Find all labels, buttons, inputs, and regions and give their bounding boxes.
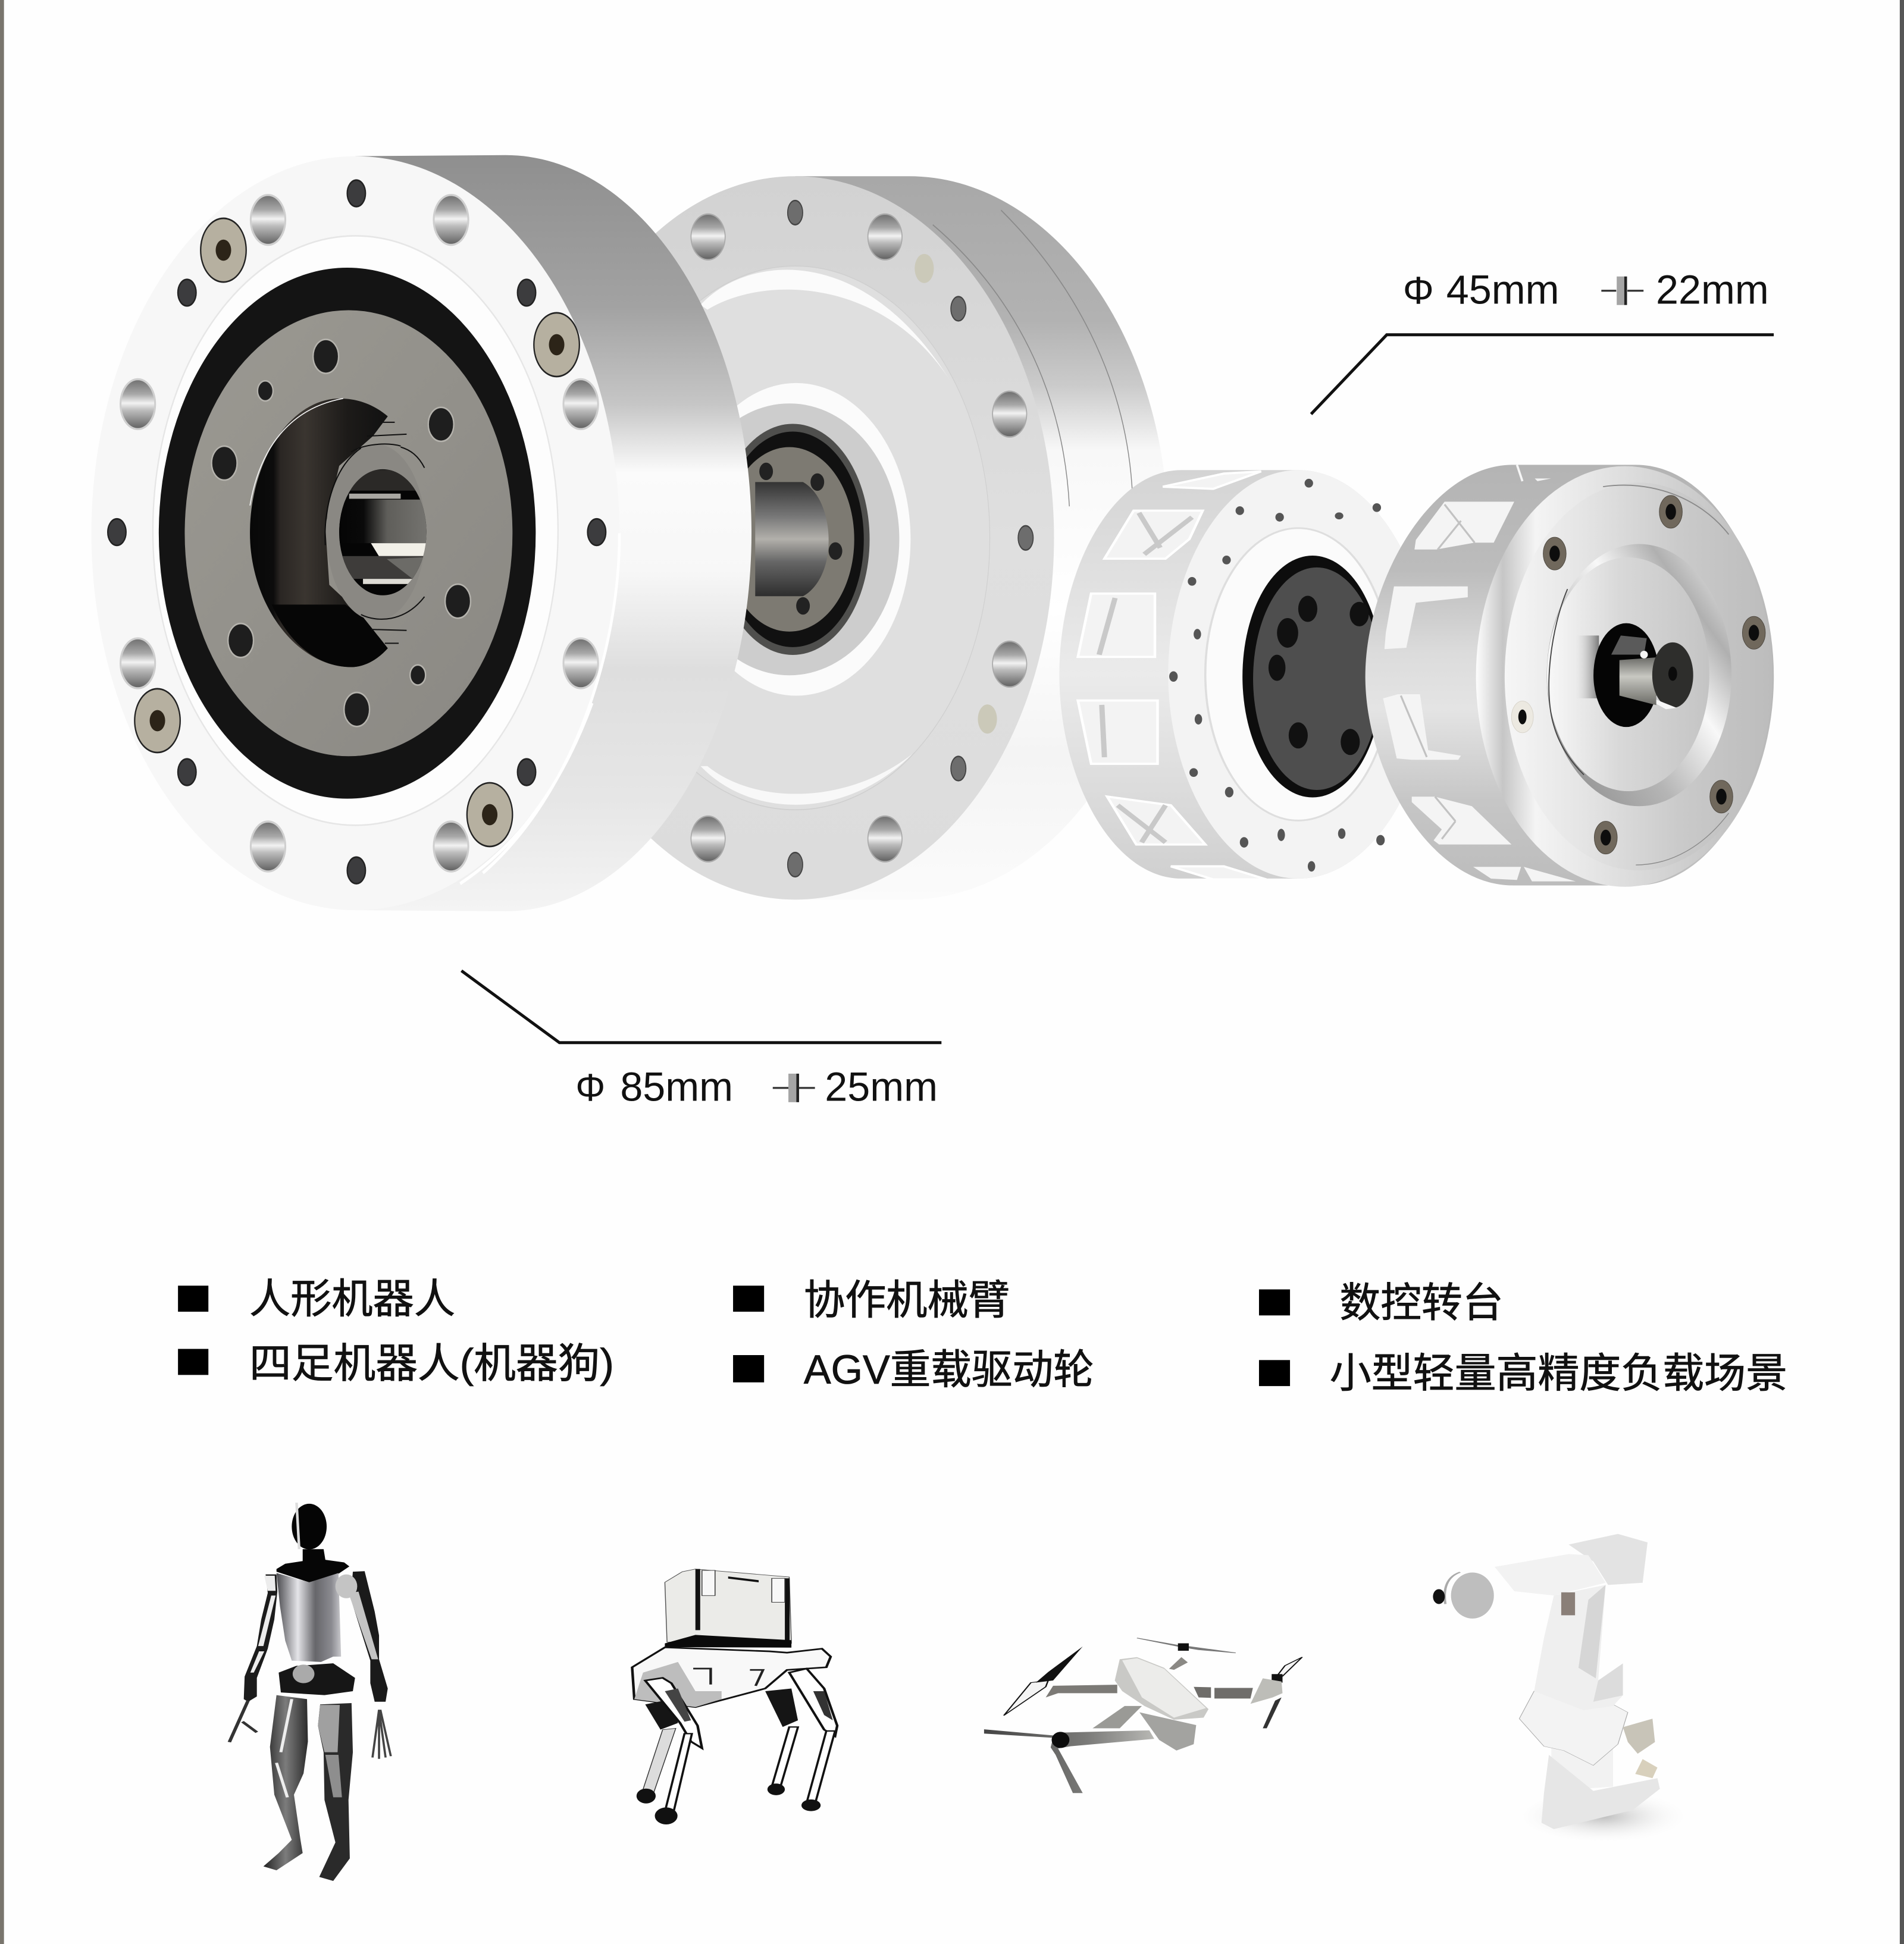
reducer 45mm rear unit	[1059, 470, 1431, 879]
hub disc	[1547, 557, 1709, 791]
callout: 45mm dimensions	[1403, 267, 1769, 313]
icon: thickness symbol	[773, 1074, 815, 1102]
front face	[1505, 482, 1773, 870]
bronze screws	[1543, 496, 1765, 854]
front rim	[1476, 466, 1774, 887]
reducer 85mm front unit	[92, 155, 751, 911]
callout: 45mm leader line	[1311, 335, 1774, 414]
item: humanoid robot: 人形机器人	[249, 1276, 455, 1322]
item: collaborative arm: 协作机械臂	[804, 1277, 1010, 1323]
centre bore of 85mm unit	[250, 399, 427, 667]
disc bolts	[212, 340, 471, 726]
item: quadruped robot: 四足机器人(机器狗)	[249, 1341, 614, 1387]
seal ring	[159, 268, 536, 799]
flange face	[92, 156, 619, 910]
callout: 45mm dimensions: 22mm	[1656, 267, 1769, 313]
application list	[178, 1276, 1787, 1396]
item: CNC rotary table	[1259, 1280, 1504, 1325]
callout: 45mm dimensions: 45mm	[1446, 267, 1559, 313]
right page edge	[1900, 0, 1904, 1944]
bore shadow	[1576, 635, 1599, 698]
item: small light precision load: 小型轻量高精度负载场景	[1330, 1350, 1787, 1396]
left page edge	[0, 0, 4, 1944]
callout: 85mm dimensions: Φ	[575, 1067, 605, 1109]
cage windows	[1383, 478, 1576, 882]
flange small holes	[108, 180, 606, 884]
bore	[1593, 623, 1659, 727]
hub ring	[1547, 544, 1731, 806]
icon: thickness symbol	[1601, 277, 1643, 305]
item: AGV drive wheel: AGV重载驱动轮	[804, 1347, 1094, 1393]
callout: 85mm dimensions	[575, 1064, 938, 1110]
output disc	[184, 310, 512, 756]
item: CNC rotary table: 数控转台	[1339, 1280, 1504, 1325]
reducer 85mm rear unit	[536, 176, 1169, 899]
flange through holes	[121, 195, 598, 871]
cage housing	[1366, 465, 1773, 885]
humanoid robot	[229, 1503, 391, 1881]
tan screws	[134, 218, 580, 846]
housing side	[355, 155, 751, 911]
callout: 85mm leader line	[462, 971, 941, 1043]
callout: 45mm dimensions: Φ	[1403, 269, 1434, 312]
industrial robot arm	[1433, 1534, 1692, 1844]
shaft	[1620, 657, 1656, 705]
drone	[984, 1638, 1302, 1793]
quadruped robot with cargo box	[632, 1569, 837, 1824]
callout: 85mm dimensions: 25mm	[825, 1064, 938, 1110]
callout: 85mm dimensions: 85mm	[620, 1064, 733, 1110]
reducer 45mm front unit	[1366, 465, 1774, 887]
